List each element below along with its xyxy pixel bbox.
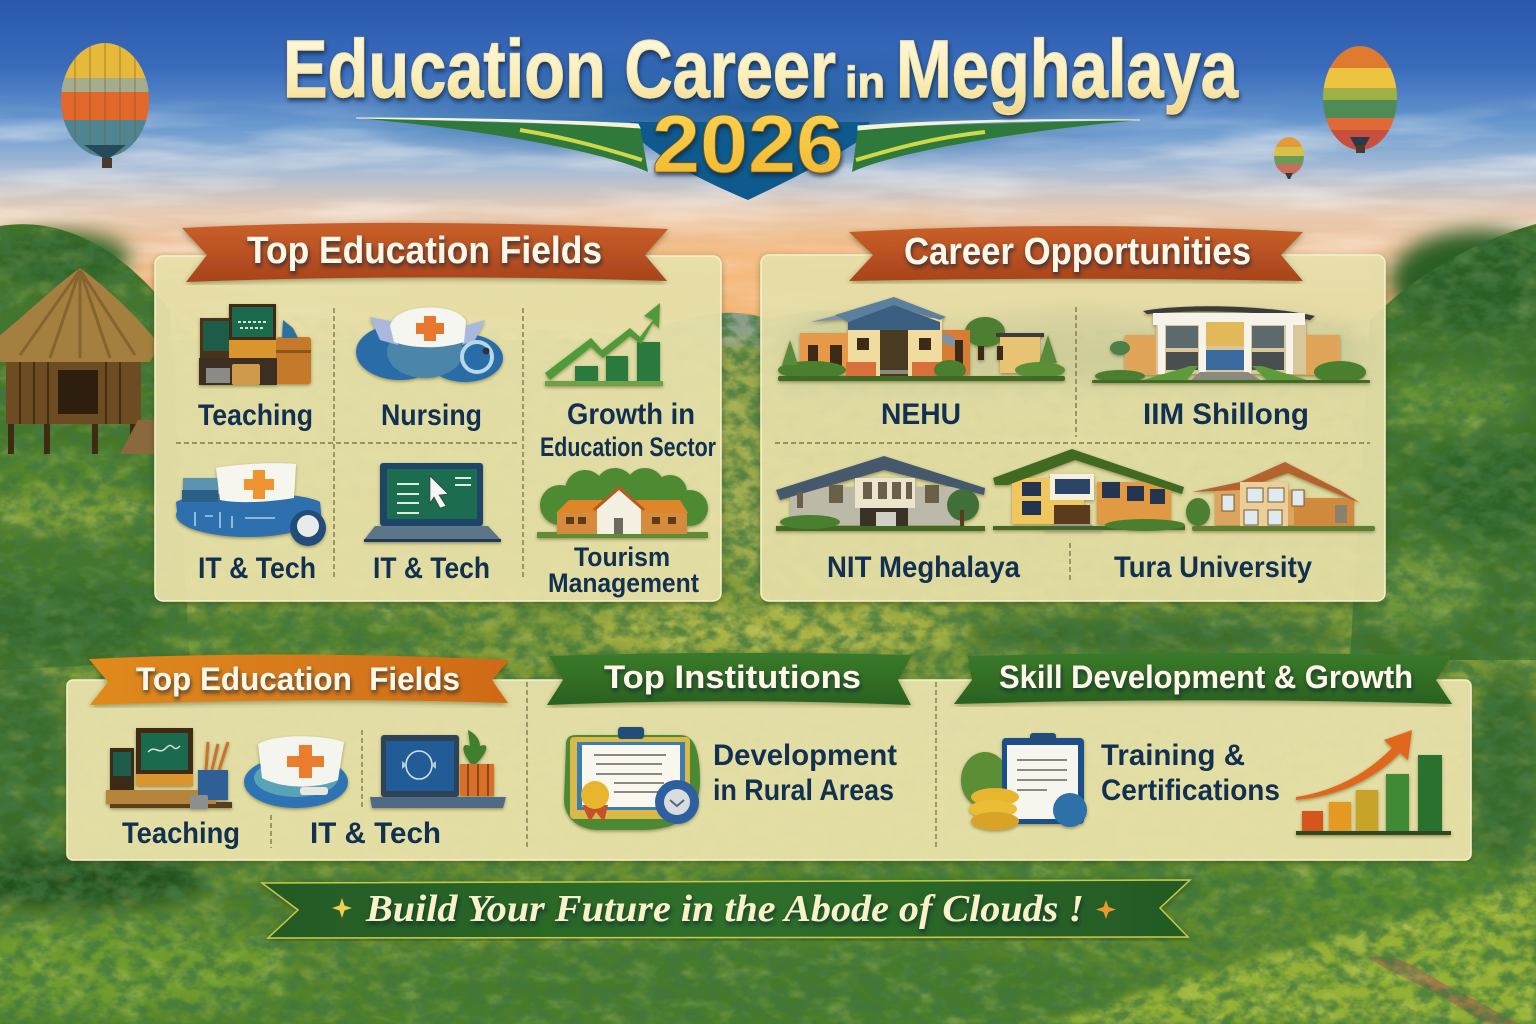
building: NIT Meghalaya <box>776 456 985 531</box>
label: growth in education sector: Growth in <box>567 398 695 431</box>
panel: top education fields <box>155 223 721 601</box>
icon: growth chart <box>545 303 663 386</box>
label: development in rural areas <box>713 739 897 807</box>
hut walls <box>6 358 141 424</box>
balloon basket <box>1356 145 1365 153</box>
chart: rising bars and arrow <box>1296 730 1451 835</box>
title banner <box>283 24 1239 200</box>
sky <box>0 0 1536 340</box>
balloon envelope <box>1320 45 1400 150</box>
bright right meadow <box>1050 880 1536 1024</box>
balloon envelope <box>61 43 149 157</box>
right wing highlight <box>858 120 1140 130</box>
hut steps <box>120 420 156 454</box>
dividers <box>775 307 1370 580</box>
label: it and tech small: IT & Tech <box>310 817 441 850</box>
footer banner <box>262 880 1190 938</box>
year chevron <box>630 122 870 200</box>
panel background <box>761 255 1385 601</box>
right wing <box>852 120 1140 172</box>
sparkle left <box>332 898 352 918</box>
icon: cap small <box>244 736 348 808</box>
ribbon: top education fields <box>89 655 509 705</box>
left wing streak <box>520 130 642 160</box>
balloon neck <box>1350 137 1370 148</box>
banner text: Build Your Future in the Abode of Clouds ! <box>365 888 1084 930</box>
hut stilts <box>8 420 136 454</box>
icon: certificate clipboard <box>564 727 700 830</box>
icon: teaching small <box>106 728 232 809</box>
icon: nursing <box>356 307 503 382</box>
ribbon heading: skill development: Skill Development & Growth <box>999 659 1413 695</box>
label: nursing: Nursing <box>381 399 482 432</box>
icon: laptop small <box>370 730 506 808</box>
hut roof <box>0 268 160 362</box>
panel: bottom strip <box>67 653 1471 860</box>
label: tourism management: Management <box>548 568 699 598</box>
main title: in <box>845 58 885 107</box>
label: tourism management: Tourism <box>574 542 670 572</box>
icon: cap and blueprint belt <box>176 463 326 546</box>
valley floor <box>0 340 1536 1024</box>
building: IIM Shillong <box>1092 306 1370 383</box>
hut <box>0 268 160 454</box>
ribbon: top institutions <box>547 653 912 705</box>
ribbon heading: Career Opportunities <box>904 231 1251 273</box>
sparkle right <box>1096 900 1116 919</box>
right wing streak <box>856 132 985 160</box>
dirt path <box>1368 956 1520 1024</box>
ribbon heading: top institutions: Top Institutions <box>604 659 861 695</box>
left wing highlight <box>356 118 640 128</box>
balloon left <box>61 43 149 168</box>
label: development in rural areas: in Rural Areas <box>713 774 894 807</box>
building: NEHU <box>778 297 1065 381</box>
balloon neck <box>84 145 126 158</box>
label: tourism management <box>548 542 699 598</box>
hut window <box>58 370 98 414</box>
icon: laptop <box>364 463 501 542</box>
label: teaching: Teaching <box>198 399 313 432</box>
far mountains <box>640 311 960 400</box>
label: development in rural areas: Development <box>713 739 897 772</box>
foliage texture <box>0 220 1536 1024</box>
year: 2026 <box>652 99 844 190</box>
label: NIT Meghalaya: NIT Meghalaya <box>827 551 1020 584</box>
ribbon heading: Top Education Fields <box>247 230 602 272</box>
sunset glow <box>560 230 960 320</box>
icon: tourism lodge <box>537 468 708 538</box>
label: Tura University: Tura University <box>1114 551 1312 584</box>
panel background <box>67 680 1471 860</box>
balloon envelope <box>1274 137 1304 174</box>
left forest hill <box>0 224 190 670</box>
wispy clouds <box>0 99 1536 313</box>
panel misty hills <box>785 310 1365 385</box>
balloon small <box>1274 137 1304 179</box>
label: IIM Shillong: IIM Shillong <box>1143 398 1309 431</box>
panel: career opportunities <box>761 226 1385 601</box>
banner ribbon <box>262 880 1190 938</box>
ribbon: skill development <box>954 653 1452 704</box>
building: middle campus <box>993 449 1185 531</box>
icon: teaching <box>199 304 311 385</box>
balloon basket <box>1285 173 1293 179</box>
right forest hill <box>1350 224 1536 660</box>
label: training and certifications: Certifications <box>1101 774 1280 807</box>
ribbon <box>182 223 668 282</box>
balloon right <box>1320 45 1400 153</box>
label: growth in education sector: Education Sector <box>540 432 716 462</box>
hut wall slats <box>20 358 120 424</box>
label: it and tech 1: IT & Tech <box>198 552 316 585</box>
main title: Education Career <box>283 24 836 115</box>
hut roof thatch <box>20 270 135 358</box>
label: teaching small: Teaching <box>122 817 240 850</box>
balloon basket <box>102 158 112 168</box>
building: Tura University <box>1186 462 1375 531</box>
main title: Meghalaya <box>896 24 1239 115</box>
label: it and tech 2: IT & Tech <box>373 552 490 585</box>
title glow <box>310 46 1190 170</box>
ribbon <box>849 226 1303 281</box>
label: training and certifications <box>1101 739 1280 807</box>
foliage blobs <box>0 230 1536 1024</box>
dividers <box>271 682 936 850</box>
label: training and certifications: Training & <box>1101 739 1245 772</box>
label: NEHU: NEHU <box>881 398 961 431</box>
panel background <box>155 256 721 601</box>
ribbon heading: top education fields: Top Education Fields <box>136 661 460 697</box>
left wing <box>356 118 648 172</box>
label: growth in education sector <box>540 398 716 462</box>
icon: clipboard with coins <box>961 733 1087 830</box>
dividers <box>176 308 523 580</box>
